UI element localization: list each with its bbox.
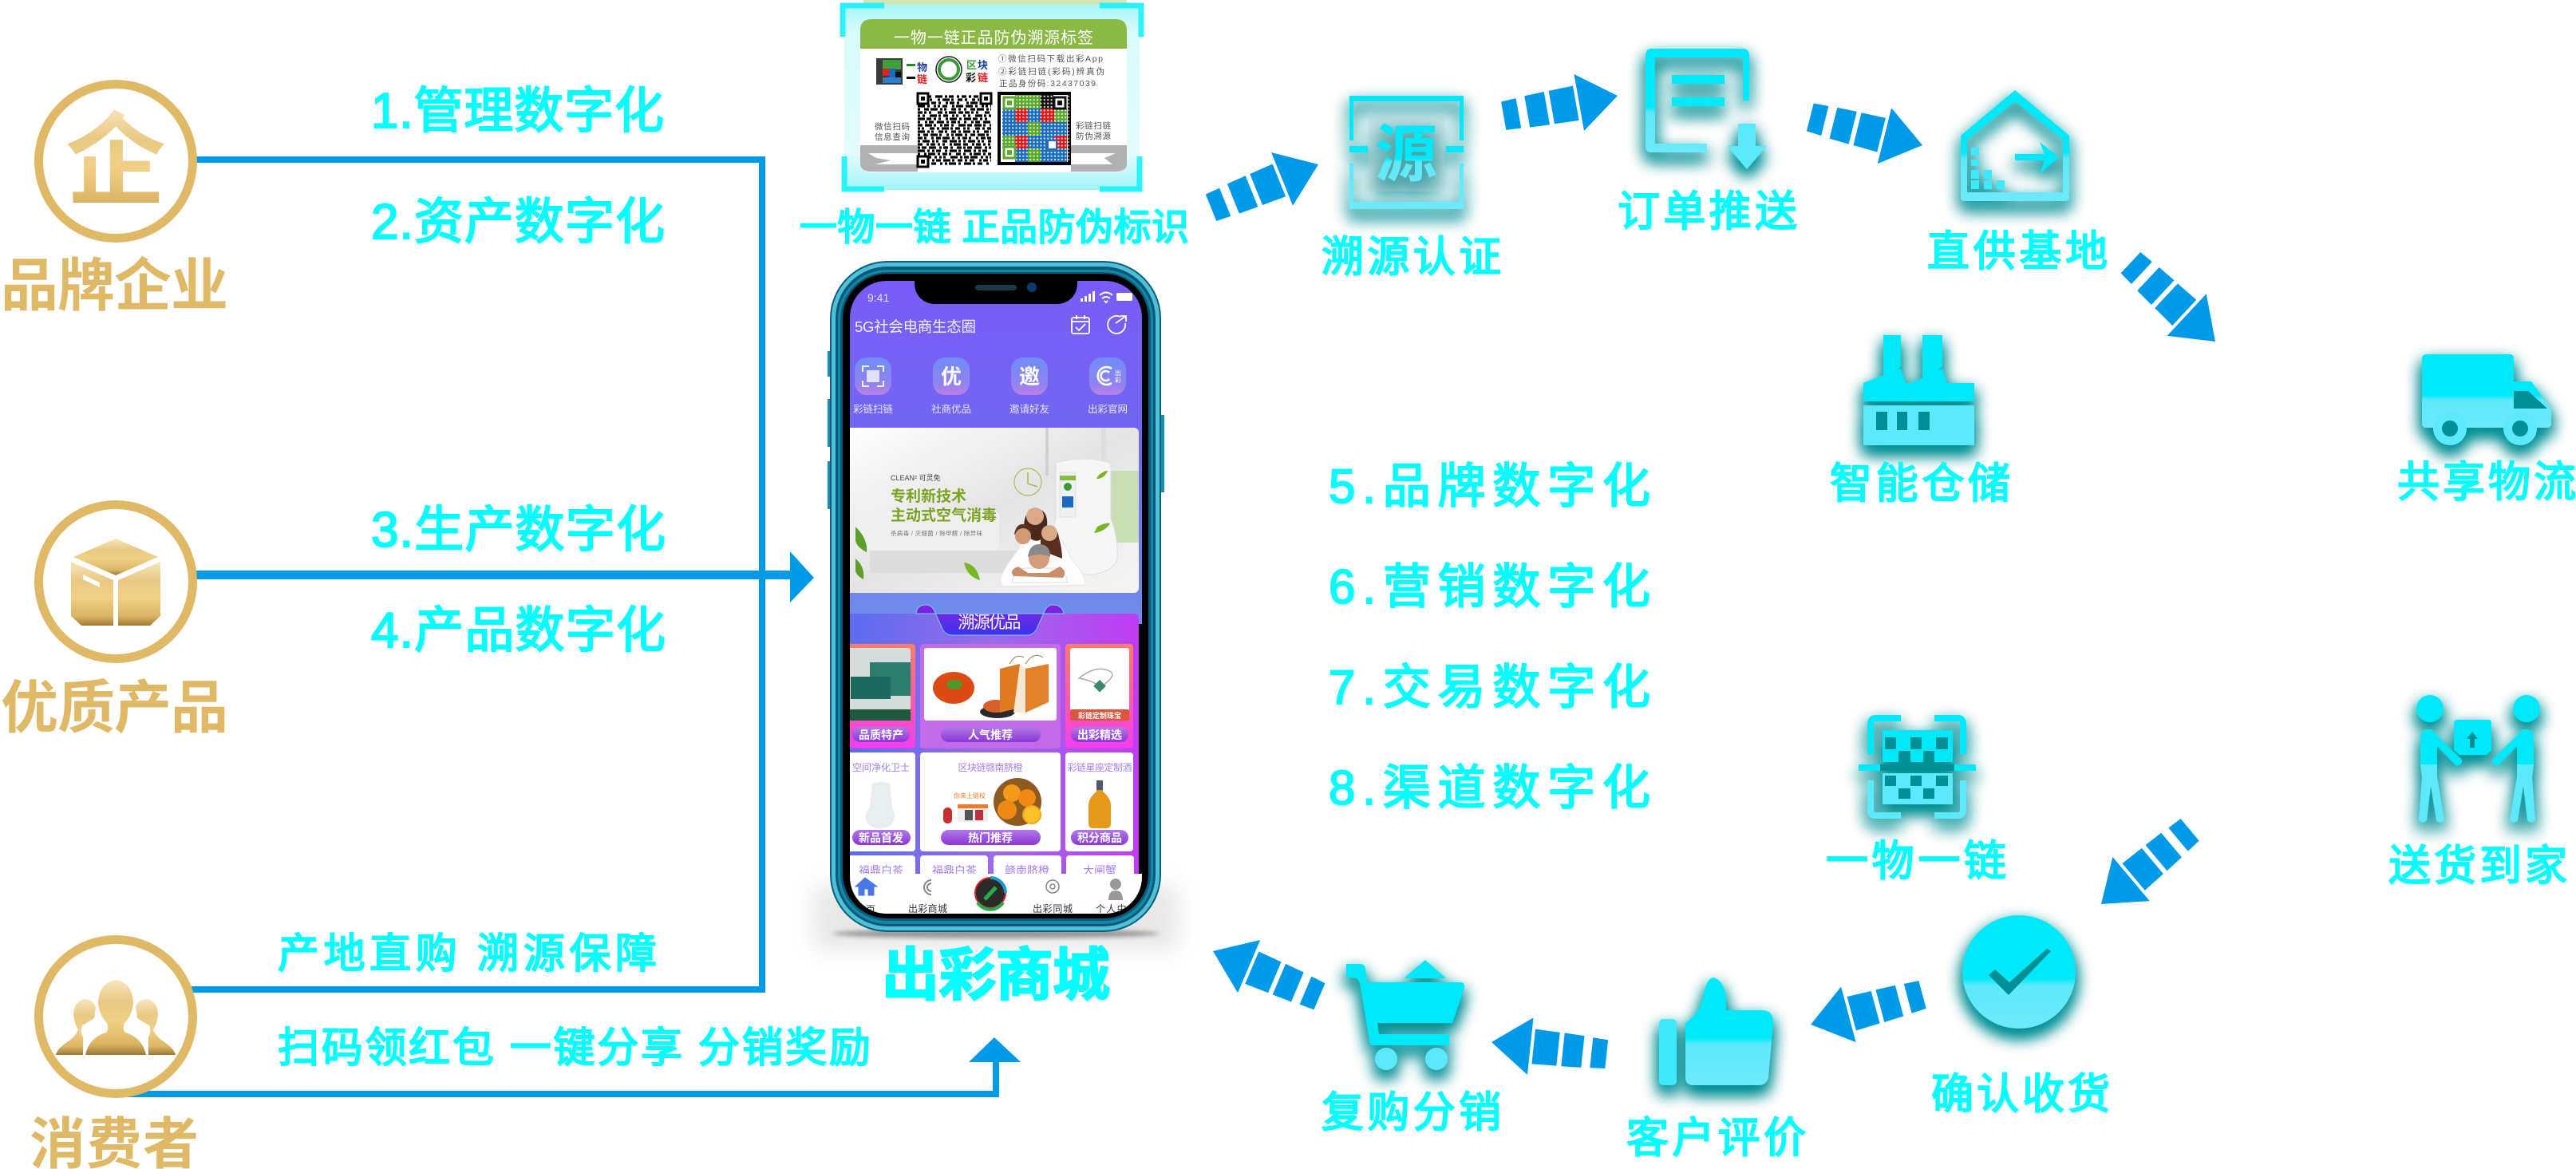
product row clipped by nav: 赣南脐橙: [1005, 864, 1049, 877]
step: confirm receipt: [1931, 915, 2110, 1118]
tag card: 一物一链正品防伪溯源标签: [894, 29, 1093, 47]
step: traceability certification: [1322, 96, 1501, 281]
logo: blockchain colour chain: [936, 57, 988, 84]
connector: brand line to spine: [192, 156, 765, 993]
item 6: 6.营销数字化: [1329, 560, 1650, 614]
caption: tag: 一物一链 正品防伪标识: [800, 206, 1189, 248]
clock mark: [1014, 468, 1041, 496]
bottom navigation: 个人中心: [1096, 902, 1137, 914]
menu: social goods: 优: [941, 365, 962, 389]
label: 直供基地: [1927, 228, 2108, 275]
tag instructions: 信息查询: [875, 132, 910, 142]
phone mockup: [814, 261, 1178, 950]
family photo: [1000, 507, 1085, 586]
menu: social goods: 社商优品: [931, 403, 971, 415]
product card: hot picks: 区块链赣南脐橙: [958, 761, 1023, 773]
badge: brand enterprise: [38, 85, 193, 238]
banner text: CLEAN² 可灵免: [891, 473, 941, 482]
screen top background: [850, 281, 1142, 624]
label: 客户评价: [1626, 1115, 1806, 1162]
product card: selections: 彩链定制珠宝: [1078, 711, 1121, 720]
product card: popular picks: [920, 644, 1061, 748]
caption: colourful mall: 出彩商城: [882, 944, 1110, 1008]
icon: thumbs up: [1659, 977, 1773, 1085]
logo: one item one chain: 链: [917, 73, 927, 85]
label: 溯源认证: [1322, 234, 1501, 281]
label: 一物一链: [1826, 838, 2006, 885]
menu: colour scan: 彩链扫链: [853, 403, 893, 415]
nav centre logo: [975, 878, 1006, 910]
product card: popular picks: 人气推荐: [968, 729, 1013, 741]
app title: 5G社会电商生态圈: [855, 318, 976, 335]
product card: local specialties: [846, 644, 915, 748]
nav store icon: [924, 880, 931, 895]
product card: selections: 出彩精选: [1077, 729, 1122, 741]
step: direct supply base: [1927, 90, 2108, 275]
product row clipped by nav: 福鼎白茶: [859, 864, 903, 877]
tag instructions: 彩链扫链: [1076, 120, 1111, 131]
tag instructions: 防伪溯源: [1076, 131, 1111, 141]
arrow to phone: [1202, 925, 1331, 1023]
status bar: [867, 291, 1132, 304]
menu: official site: 出: [1115, 369, 1121, 377]
label: brand enterprise: 品牌企业: [1, 255, 228, 318]
process arrows: [1200, 68, 2235, 1083]
notch: [915, 275, 1077, 304]
label: 订单推送: [1618, 188, 1797, 235]
logo: blockchain colour chain: 块: [978, 59, 988, 71]
icon: scan code: [1859, 718, 1976, 816]
menu: social goods: [931, 357, 971, 415]
product card: new release: 空间净化卫士: [852, 762, 910, 773]
arrow to logistics: [2111, 242, 2235, 362]
phone floor shadow: [814, 886, 1178, 950]
bottom navigation: [846, 874, 1145, 918]
item 4: 4.产品数字化: [371, 603, 666, 658]
connector: product arrow to phone: [192, 551, 814, 602]
product row clipped by nav: [846, 855, 1134, 887]
icon: document with arrow: [1646, 49, 1767, 169]
banner: air purifier: 杀病毒 / 灭细菌 / 除甲醛 / 除异味: [891, 529, 983, 537]
food plate: [933, 672, 1015, 718]
banner: air purifier: [846, 428, 1139, 593]
arrow to traceability: [1200, 138, 1329, 235]
icon: shopping cart: [1346, 960, 1464, 1070]
arrow to order push: [1499, 68, 1622, 144]
icon: factory: [1863, 335, 1974, 445]
banner: air purifier: 主动式空气消毒: [891, 506, 997, 524]
label: 智能仓储: [1830, 460, 2010, 507]
left column: stakeholders and connectors: [1, 85, 1021, 1169]
product row clipped by nav: 福鼎白茶: [932, 864, 977, 877]
menu: invite friends: 邀请好友: [1009, 403, 1049, 415]
banner: air purifier: 专利新技术: [891, 488, 966, 505]
tag instructions: [875, 53, 1111, 142]
leaves: [855, 471, 1110, 580]
product card: selections: [1065, 644, 1133, 748]
tag card: [860, 19, 1127, 172]
consumer benefit text 1: 产地直购 溯源保障: [278, 931, 657, 977]
product card: points goods: 积分商品: [1077, 831, 1122, 844]
product card: points goods: [1065, 752, 1133, 851]
connector: consumer arrow to store: [128, 1037, 1021, 1097]
icon: box: [71, 539, 160, 626]
bottom navigation: 出彩同城: [1033, 903, 1073, 914]
label: 送货到家: [2388, 843, 2567, 890]
section ribbon: 溯源优品: [958, 614, 1021, 632]
digitalization labels 1-4: [371, 84, 666, 658]
phone screen: [846, 281, 1145, 918]
purifier product: [1045, 459, 1117, 575]
icon: truck: [2422, 354, 2551, 445]
panel: anti-counterfeit tag: [843, 0, 1141, 190]
nav local icon: [1046, 880, 1059, 893]
nav home icon: [855, 878, 877, 895]
product card: points goods: 彩链星座定制酒: [1068, 761, 1132, 773]
menu: colour scan: [853, 357, 893, 415]
arrow to repurchase: [1488, 1013, 1610, 1083]
step: one item one chain: [1826, 718, 2006, 885]
bottom navigation: 首页: [856, 904, 875, 915]
menu: official site: [1088, 357, 1128, 415]
product card: hot picks: [920, 752, 1061, 851]
arrow to supply base: [1804, 89, 1930, 173]
tag instructions: ①微信扫码下载出彩App: [998, 53, 1103, 64]
item 5: 5.品牌数字化: [1329, 460, 1650, 513]
logo: blockchain colour chain: 彩: [966, 72, 976, 84]
menu: official site: 出彩官网: [1088, 403, 1128, 415]
bottom navigation: 出彩商城: [908, 902, 947, 914]
item 3: 3.生产数字化: [371, 503, 666, 558]
product row clipped by nav: 大闸蟹: [1083, 864, 1116, 877]
gift boxes: [1000, 655, 1049, 713]
header icons: [1072, 315, 1126, 334]
badge: consumer: [38, 940, 193, 1093]
badge: quality product: [38, 504, 193, 659]
product card: new release: 新品首发: [859, 831, 903, 844]
product card: new release: [846, 752, 915, 851]
step: order push: [1618, 49, 1797, 235]
tag corner brackets: [843, 6, 1141, 189]
tag instructions: ②彩链扫链(彩码)辨真伪: [998, 66, 1104, 77]
phone side buttons: [828, 351, 1164, 509]
menu: official site: 彩: [1115, 376, 1121, 384]
item 1: 1.管理数字化: [371, 84, 664, 139]
menu: invite friends: [1009, 357, 1049, 415]
logo: one item one chain: [876, 58, 927, 85]
icon: warehouse house: [1961, 90, 2069, 201]
icon: check circle: [1962, 915, 2076, 1029]
product card: hot picks: 你来上链校: [954, 792, 986, 800]
label: 确认收货: [1931, 1071, 2110, 1118]
nav profile icon: [1108, 879, 1123, 900]
section ribbon: [916, 605, 1064, 635]
menu: invite friends: 邀: [1019, 365, 1040, 389]
item 8: 8.渠道数字化: [1329, 761, 1650, 815]
icon: people: [56, 980, 176, 1055]
logo: blockchain colour chain: 链: [978, 72, 988, 84]
icon: enterprise character: 企: [65, 105, 166, 218]
step: repurchase and resale: [1322, 960, 1501, 1136]
step: customer review: [1626, 977, 1806, 1162]
item 2: 2.资产数字化: [371, 195, 665, 250]
tag instructions: 微信扫码: [875, 121, 910, 132]
label: 复购分销: [1322, 1089, 1501, 1136]
digitalization labels 5-8: [1329, 460, 1650, 815]
product card: local specialties: 品质特产: [859, 729, 903, 741]
item 7: 7.交易数字化: [1329, 661, 1650, 714]
icon: source frame: [1349, 96, 1464, 209]
icon: source frame: 源: [1375, 119, 1437, 189]
tag instructions: 正品身份码:32437039: [999, 78, 1096, 89]
icon: two people handing a box: [2416, 695, 2540, 822]
product card: hot picks: 热门推荐: [968, 831, 1013, 844]
label: 共享物流: [2397, 459, 2576, 506]
QR code: wechat: [918, 93, 991, 167]
logo: blockchain colour chain: 区: [966, 59, 977, 71]
step: delivery to home: [2388, 695, 2567, 890]
step: shared logistics: [2397, 354, 2576, 506]
logo: one item one chain: 物: [917, 61, 927, 73]
status bar: 9:41: [867, 291, 889, 304]
label: quality product: 优质产品: [1, 677, 228, 740]
section background: [846, 614, 1139, 877]
phone body: [830, 261, 1161, 932]
arrow to review: [1804, 967, 1930, 1052]
step: smart warehouse: [1830, 335, 2010, 507]
consumer benefit text 2: 扫码领红包 一键分享 分销奖励: [278, 1025, 871, 1072]
arrow to receipt: [2083, 808, 2208, 926]
QR code: colour code: [998, 92, 1071, 165]
